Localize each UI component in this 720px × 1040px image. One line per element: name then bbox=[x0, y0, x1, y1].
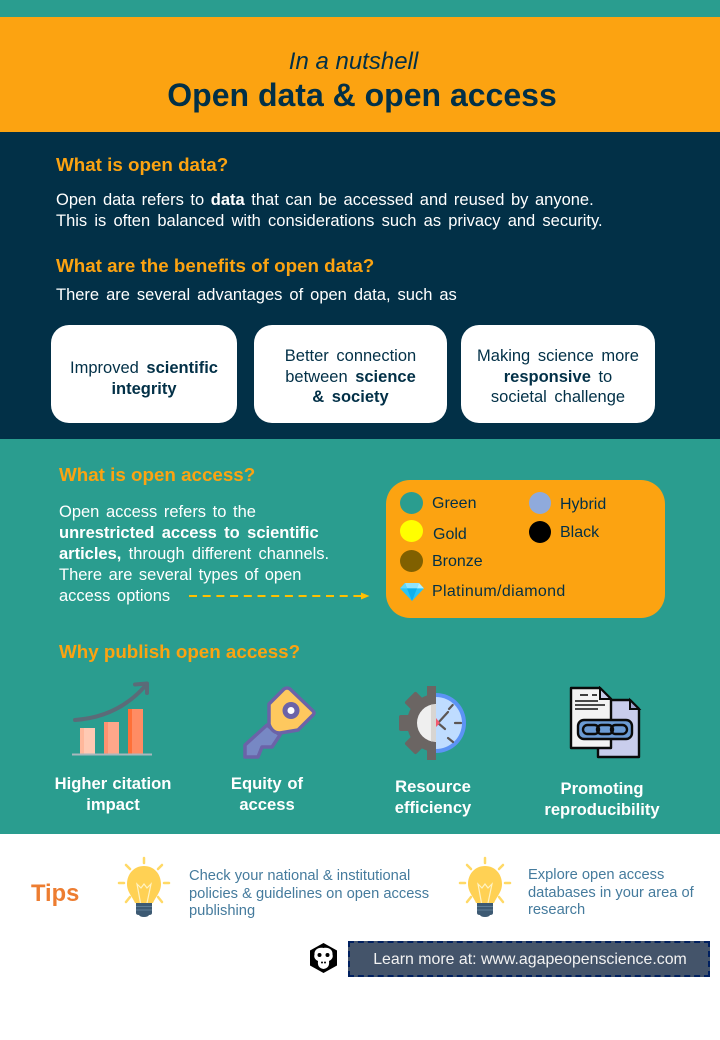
caption: resource efficiency: efficiency bbox=[395, 798, 471, 817]
legend: gold bbox=[400, 520, 423, 542]
text: open data definition bbox=[56, 191, 603, 230]
text: tip one bbox=[189, 868, 429, 919]
caption: equity of access: Equity of bbox=[231, 774, 303, 793]
legend: bronze bbox=[400, 550, 423, 572]
card: societal challenge: societal challenge bbox=[491, 388, 625, 406]
text: tip one: publishing bbox=[189, 903, 255, 919]
caption: higher citation impact bbox=[55, 774, 171, 814]
text: open access definition: Open access refers to the bbox=[59, 503, 256, 521]
text: tip two: databases in your area of bbox=[528, 884, 694, 900]
card: science and society: between science bbox=[285, 368, 416, 386]
text: tip two: Explore open access bbox=[528, 867, 664, 883]
text: open access definition: access options bbox=[59, 587, 170, 605]
arrow: dashed to options bbox=[189, 592, 370, 600]
caption: higher citation impact: impact bbox=[86, 795, 140, 814]
heading: why publish open access: Why publish open access? bbox=[59, 641, 300, 662]
card: science and society: & society bbox=[312, 388, 389, 406]
text: benefits intro: There are several advantages of open data, such as bbox=[56, 286, 457, 304]
heading: what is open access: What is open access? bbox=[59, 464, 255, 485]
caption: promoting reproducibility: reproducibility bbox=[544, 800, 660, 819]
caption: higher citation impact: Higher citation bbox=[55, 774, 171, 793]
text: open access definition: articles, through different channels. bbox=[59, 545, 329, 563]
icon: rising bar chart bbox=[72, 682, 152, 756]
panel: open data bbox=[0, 132, 720, 439]
icon: light bulb right bbox=[458, 856, 512, 917]
card: scientific integrity: Improved scientific bbox=[70, 359, 218, 377]
label: black: Black bbox=[560, 524, 599, 541]
card: science and society: Better connection bbox=[285, 347, 416, 365]
legend: hybrid bbox=[529, 492, 551, 514]
text: tip two: research bbox=[528, 902, 585, 918]
button: learn more bbox=[348, 941, 710, 977]
text: open data definition: Open data refers to data that can be accessed and reused by anyone. bbox=[56, 191, 594, 209]
button: learn more: Learn more at: www.agapeopenscience.com bbox=[373, 951, 687, 968]
text: tip one: Check your national & institutional bbox=[189, 868, 410, 884]
label: bronze: Bronze bbox=[432, 553, 483, 570]
text: open access definition: unrestricted access to scientific bbox=[59, 524, 319, 542]
panel: open access types legend bbox=[386, 480, 665, 618]
icon: gear and clock bbox=[399, 686, 466, 760]
caption: resource efficiency: Resource bbox=[395, 777, 471, 796]
legend: black bbox=[529, 521, 551, 543]
subtitle: In a nutshell bbox=[289, 48, 418, 75]
icon: light bulb left bbox=[118, 856, 170, 917]
title: Open data & open access bbox=[167, 77, 557, 113]
icon: key bbox=[243, 686, 316, 759]
text: open data definition: This is often balanced with considerations such as privacy and security. bbox=[56, 212, 603, 230]
icon: linked documents bbox=[570, 686, 642, 758]
label: green: Green bbox=[432, 495, 476, 512]
icon: monkey logo bbox=[310, 943, 337, 973]
text: tip two bbox=[528, 867, 694, 918]
card: scientific integrity: integrity bbox=[111, 380, 177, 398]
card: societal challenge bbox=[461, 325, 655, 423]
legend: green bbox=[400, 492, 423, 514]
label: platinum/diamond: Platinum/diamond bbox=[432, 583, 566, 600]
card: science and society bbox=[254, 325, 447, 423]
caption: equity of access: access bbox=[239, 795, 295, 814]
panel: open access bbox=[0, 439, 720, 834]
caption: promoting reproducibility bbox=[544, 779, 660, 819]
band: top teal strip bbox=[0, 0, 720, 17]
label: hybrid: Hybrid bbox=[560, 496, 606, 513]
card: societal challenge: responsive to bbox=[504, 368, 612, 386]
heading: what is open data: What is open data? bbox=[56, 154, 228, 175]
text: tip one: policies & guidelines on open access bbox=[189, 886, 429, 902]
card: societal challenge: Making science more bbox=[477, 347, 639, 365]
heading: benefits of open data: What are the benefits of open data? bbox=[56, 255, 374, 276]
card: scientific integrity bbox=[51, 325, 237, 423]
heading: tips: Tips bbox=[31, 881, 79, 907]
caption: equity of access bbox=[231, 774, 304, 814]
caption: promoting reproducibility: Promoting bbox=[561, 779, 643, 798]
icon: diamond bbox=[400, 583, 424, 601]
caption: resource efficiency bbox=[395, 777, 472, 817]
panel: title banner bbox=[0, 17, 720, 132]
text: open access definition bbox=[59, 503, 329, 605]
text: open access definition: There are several types of open bbox=[59, 566, 301, 584]
label: gold: Gold bbox=[433, 526, 467, 543]
